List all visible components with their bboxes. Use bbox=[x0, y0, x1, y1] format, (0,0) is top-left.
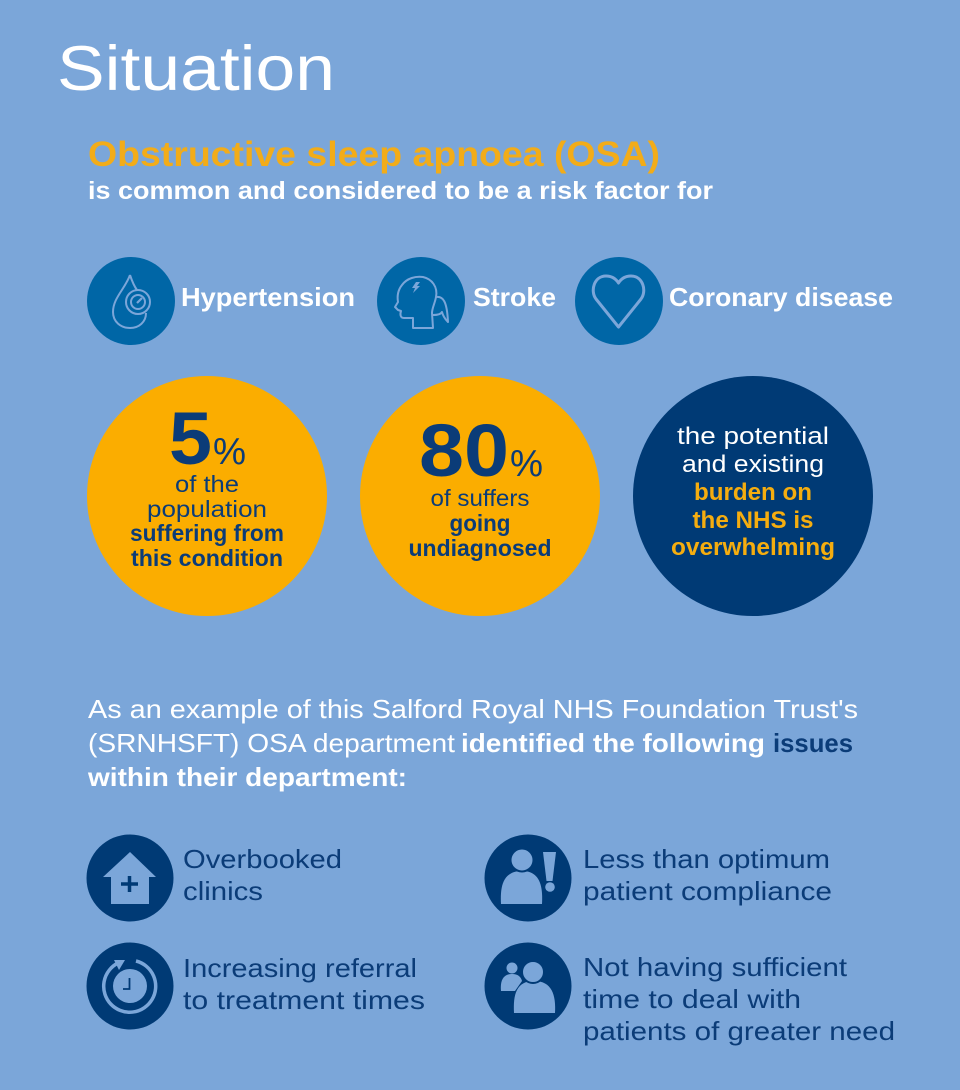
stat circle: 80% bbox=[360, 376, 600, 616]
stat circle: 80%: % bbox=[510, 443, 543, 485]
stat circle: 5%: this condition bbox=[131, 545, 283, 571]
label: Overbooked bbox=[183, 844, 342, 874]
stat circle: NHS burden: the potential bbox=[677, 423, 829, 450]
issue: patient compliance bbox=[484, 834, 832, 922]
intro paragraph: issues bbox=[773, 728, 853, 758]
stat circle: 80%: of suffers bbox=[430, 485, 530, 511]
label: Not having sufficient bbox=[583, 952, 848, 982]
heading: obstructive sleep apnoea: is common and considered to be a risk factor for bbox=[88, 177, 713, 205]
heading: obstructive sleep apnoea bbox=[88, 135, 713, 205]
stat circle: NHS burden: overwhelming bbox=[671, 534, 835, 561]
issue: overbooked clinics bbox=[86, 834, 342, 922]
label: time to deal with bbox=[583, 984, 801, 1014]
stat circle: 5%: population bbox=[147, 496, 267, 522]
stat circle: 80%: 80 bbox=[419, 409, 509, 492]
intro paragraph: identified the following bbox=[461, 728, 765, 758]
label: Stroke bbox=[473, 282, 556, 312]
stat circle: 5% bbox=[87, 376, 327, 616]
label: to treatment times bbox=[183, 985, 425, 1015]
risk: stroke bbox=[377, 257, 556, 345]
label: Coronary disease bbox=[669, 282, 893, 312]
heading: obstructive sleep apnoea: Obstructive sleep apnoea (OSA) bbox=[88, 135, 660, 174]
title: Situation bbox=[57, 34, 335, 104]
label bbox=[183, 844, 342, 906]
icon: clock with arrow bbox=[86, 942, 174, 1030]
stat circle: 5%: of the bbox=[175, 471, 239, 497]
intro paragraph: As an example of this Salford Royal NHS Foundation Trust's bbox=[88, 694, 858, 724]
risk: coronary disease bbox=[575, 257, 893, 345]
icon: house with plus bbox=[86, 834, 174, 922]
stat circle: 5%: suffering from bbox=[130, 520, 284, 546]
stat circle: 5%: 5 bbox=[169, 397, 212, 480]
risk: hypertension bbox=[87, 257, 355, 345]
stat circle: 80%: going bbox=[450, 510, 510, 536]
intro paragraph: within their department: bbox=[87, 762, 407, 792]
icon: two people bbox=[484, 942, 572, 1030]
label: Increasing referral bbox=[183, 953, 417, 983]
label bbox=[583, 952, 895, 1046]
icon: heart bbox=[575, 257, 663, 345]
label bbox=[583, 844, 832, 906]
label: patients of greater need bbox=[583, 1016, 895, 1046]
issue: insufficient time bbox=[484, 942, 895, 1046]
label bbox=[183, 953, 425, 1015]
icon: person with exclamation mark bbox=[484, 834, 572, 922]
stat circle: NHS burden: and existing bbox=[682, 451, 824, 478]
intro paragraph: (SRNHSFT) OSA department bbox=[88, 728, 456, 758]
intro paragraph bbox=[87, 694, 858, 792]
stat circle: 80%: undiagnosed bbox=[408, 535, 552, 561]
stat circle: NHS burden bbox=[633, 376, 873, 616]
label: patient compliance bbox=[583, 876, 832, 906]
label: Less than optimum bbox=[583, 844, 830, 874]
label: Hypertension bbox=[181, 282, 355, 312]
issue: referral times bbox=[86, 942, 425, 1030]
icon: blood drop with gauge bbox=[87, 257, 175, 345]
stat circle: NHS burden: burden on bbox=[694, 479, 812, 506]
label: clinics bbox=[183, 876, 263, 906]
stat circle: NHS burden: the NHS is bbox=[692, 507, 814, 534]
stat circle: 5%: % bbox=[213, 431, 246, 473]
icon: head with lightning bolt bbox=[377, 257, 465, 345]
